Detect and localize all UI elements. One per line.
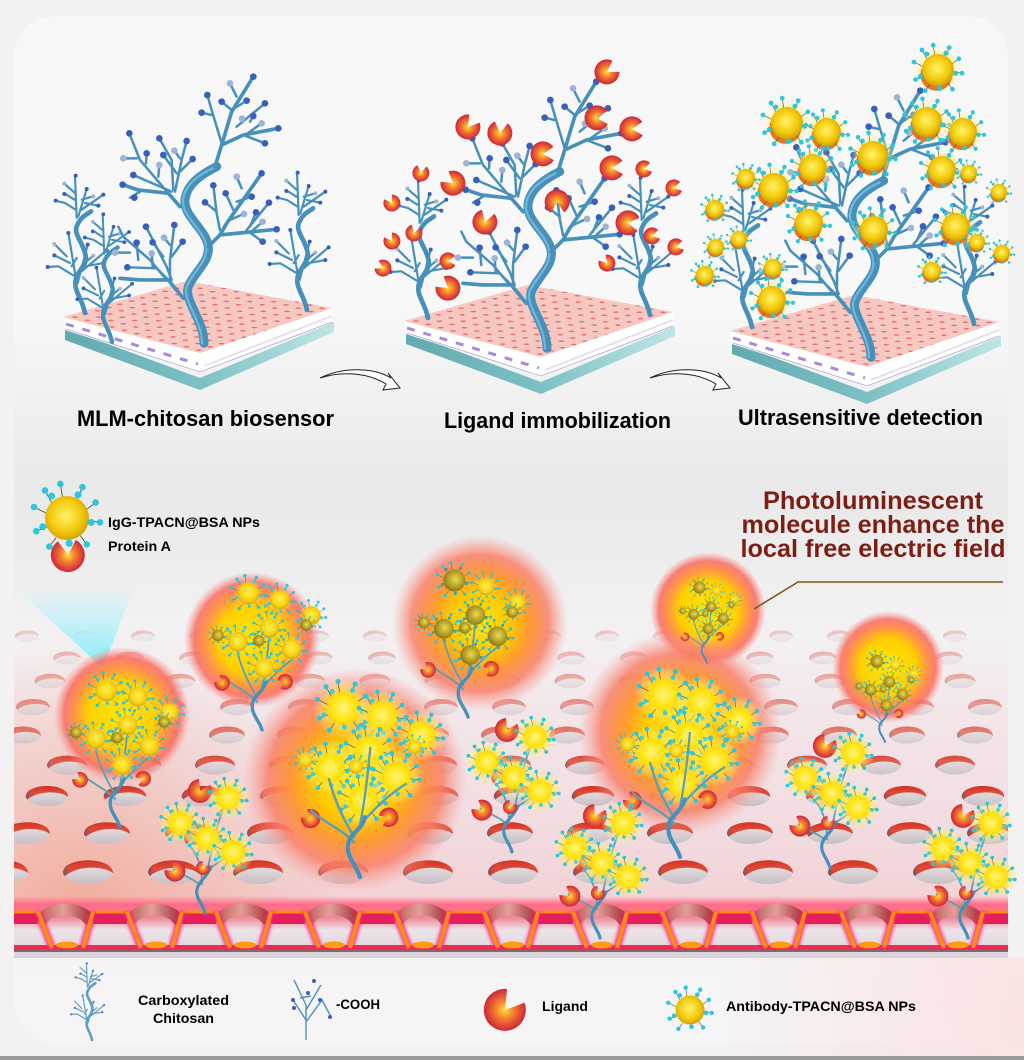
label: -COOH: -COOH: [336, 996, 380, 1012]
icon: Protein A: [44, 531, 92, 579]
chitosan trees 1: [46, 73, 331, 343]
perforated holes: [0, 630, 1013, 884]
icon: carboxylated chitosan: [70, 962, 105, 1040]
callout text: Photoluminescent: [763, 487, 984, 515]
legend: [70, 962, 916, 1040]
arrow 1: [320, 370, 400, 390]
icon: -COOH: [291, 979, 332, 1040]
ligands on trees: [373, 56, 688, 301]
panel: Ligand immobilization: [373, 56, 688, 394]
callout text: local free electric field: [740, 535, 1006, 563]
label: Protein A: Protein A: [108, 539, 171, 554]
icon: antibody nanoparticle: [666, 985, 714, 1031]
icon: ligand: [484, 989, 526, 1031]
callout leader line: [754, 582, 1003, 609]
bottom border line: [0, 1056, 1024, 1060]
label: Carboxylated Chitosan: Carboxylated: [138, 992, 229, 1008]
label: IgG-TPACN@BSA NPs: IgG-TPACN@BSA NPs: [108, 515, 260, 530]
heading: Ligand immobilization: Ligand immobilization: [444, 408, 671, 433]
red fluorescence glows: [54, 535, 944, 892]
nanoparticles on trees: [690, 43, 1015, 321]
heading: Ultrasensitive detection: Ultrasensitive detection: [738, 405, 983, 430]
surface gradient: [14, 692, 1008, 902]
label: Carboxylated Chitosan: [138, 992, 229, 1026]
substrate 1: [63, 281, 334, 390]
panel: MLM-chitosan biosensor: [46, 73, 334, 390]
nanoparticle trees on the surface: [66, 561, 1018, 938]
chitosan trees 3: [713, 87, 998, 357]
icon: IgG-TPACN@BSA nanoparticle: [31, 481, 103, 550]
base strip with neon trapezoids: [14, 896, 1008, 958]
arrow 2: [650, 370, 730, 390]
callout text: molecule enhance the: [742, 511, 1005, 539]
heading: MLM-chitosan biosensor: MLM-chitosan biosensor: [77, 406, 334, 431]
panel: Ultrasensitive detection: [690, 43, 1015, 404]
label: Ligand: Ligand: [542, 998, 588, 1014]
left pink wash: [14, 677, 306, 904]
legend tint: [724, 958, 1024, 1056]
label: Carboxylated Chitosan: Chitosan: [153, 1010, 214, 1026]
light beam: [12, 585, 135, 668]
lower scene: sensor surface: [0, 620, 1013, 958]
substrate 3: [730, 295, 1001, 404]
substrate 2: [404, 285, 675, 394]
chitosan trees 2: [389, 78, 674, 348]
callout text: [740, 487, 1006, 563]
label: Antibody-TPACN@BSA NPs: Antibody-TPACN@BSA NPs: [726, 998, 916, 1014]
